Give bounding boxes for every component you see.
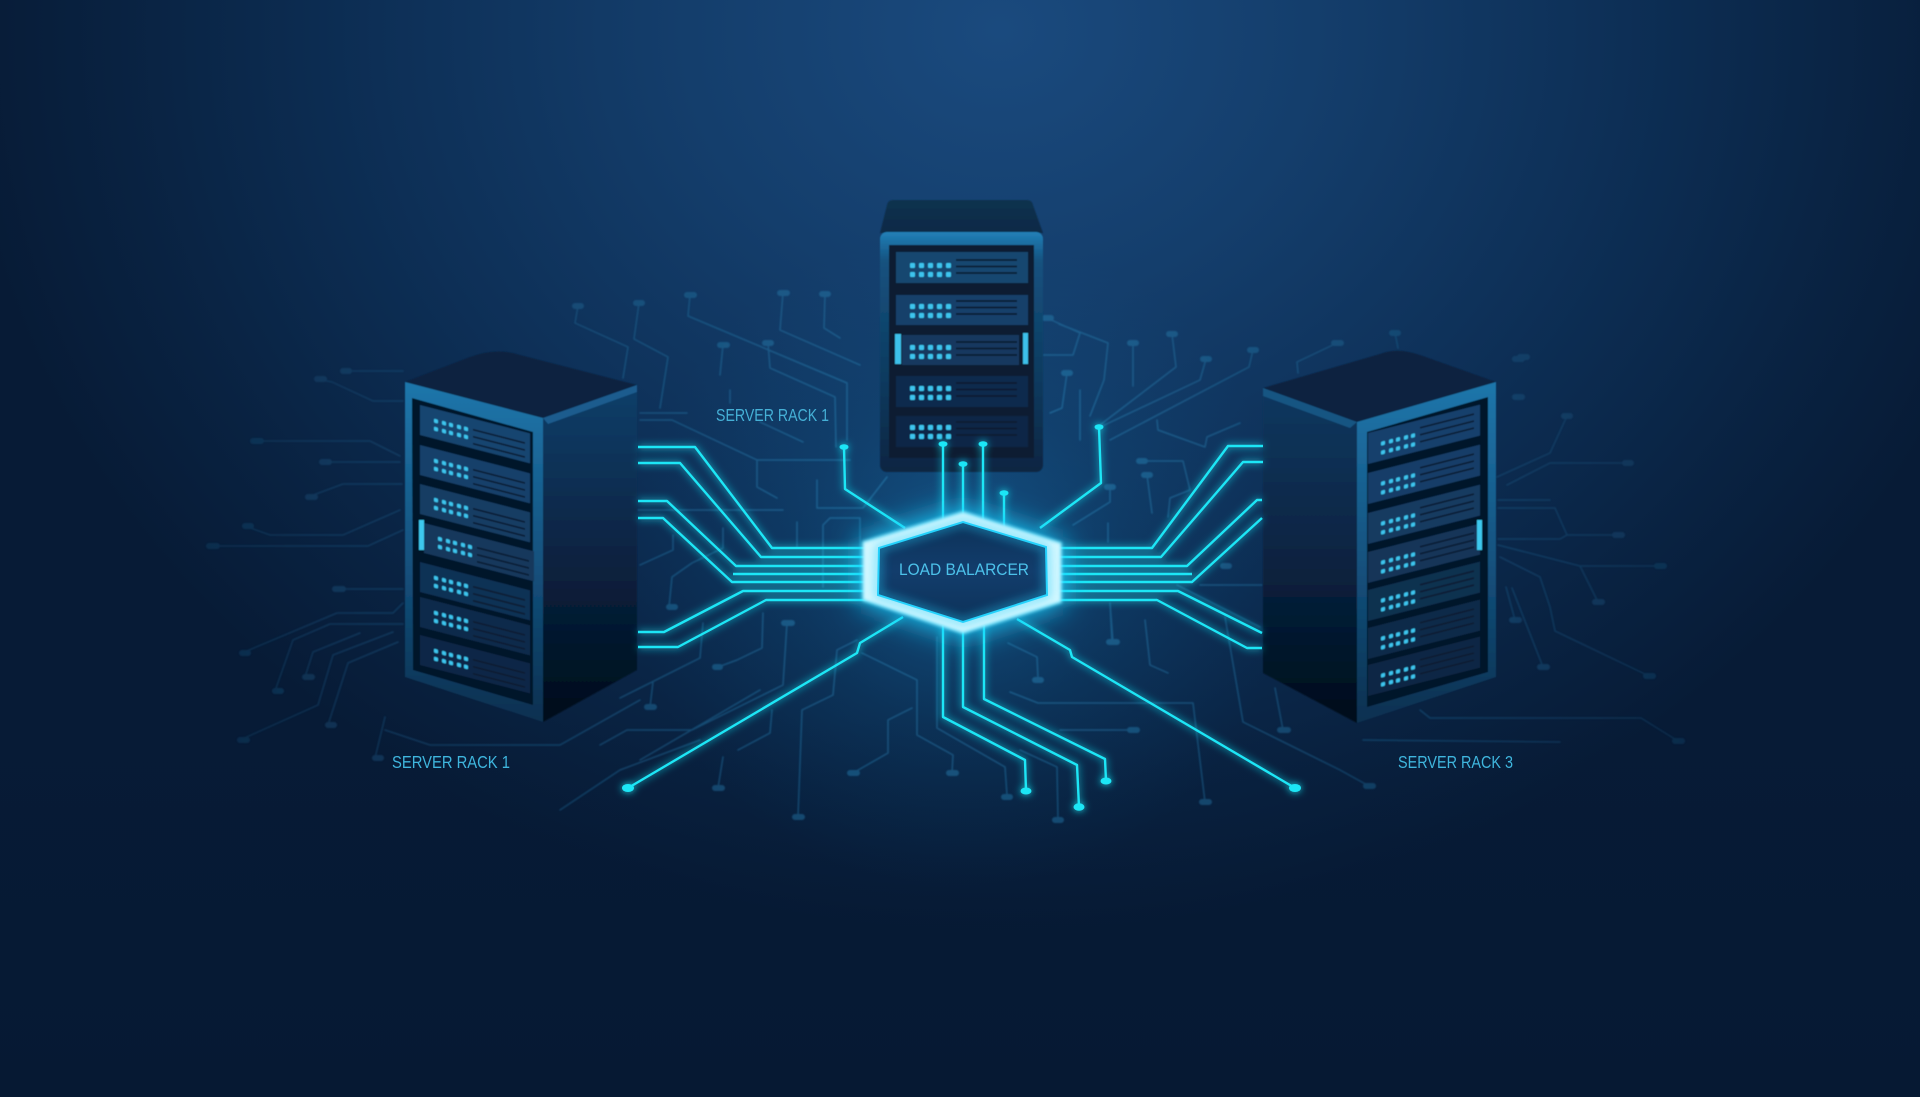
centre rack frame [880, 232, 1043, 472]
left rack top face [405, 351, 637, 418]
right rack side face [1263, 388, 1357, 723]
left rack status bar [419, 520, 424, 550]
hexagon outer glow [861, 508, 1063, 637]
bright data traces [622, 424, 1301, 811]
diagonal long traces [628, 617, 1295, 788]
centre rack top cap [880, 200, 1043, 233]
right rack side highlight band [1263, 388, 1357, 428]
centre rack panels [896, 252, 1028, 447]
upper traces [844, 427, 1101, 530]
label: server rack 1 centre: SERVER RACK 1 [716, 405, 829, 425]
right rack top face [1263, 351, 1496, 422]
right rack status bar [1477, 520, 1482, 550]
centre rack inner bay [889, 245, 1034, 458]
hexagon inner glow [878, 522, 1047, 622]
left server rack [405, 351, 637, 722]
left rack side highlight band [543, 385, 637, 424]
right server rack [1263, 351, 1496, 723]
left rack front frame [405, 382, 543, 722]
right rack units [1368, 405, 1480, 696]
centre rack status bars [895, 333, 1028, 364]
centre rack indicator lights [910, 260, 1017, 439]
right rack inner bay [1367, 397, 1488, 707]
load balancer hexagon [861, 508, 1063, 637]
left rack inner bay [412, 398, 533, 705]
label: server rack 1 left: SERVER RACK 1 [392, 752, 510, 772]
hexagon inner panel [878, 522, 1047, 622]
trace end nodes [622, 424, 1301, 811]
left rack units [420, 405, 534, 693]
centre server rack [880, 200, 1043, 472]
left rack side face [543, 385, 637, 722]
right rack front frame [1357, 382, 1496, 723]
traces to left rack [638, 447, 880, 647]
label: server rack 3 right: SERVER RACK 3 [1398, 752, 1513, 772]
central glow [630, 230, 1290, 890]
faint circuit traces [209, 293, 1682, 820]
hexagon label: LOAD BALARCER [899, 561, 1029, 579]
traces to right rack [1045, 446, 1263, 648]
hexagon ring [863, 512, 1061, 633]
lower traces [943, 625, 1106, 807]
